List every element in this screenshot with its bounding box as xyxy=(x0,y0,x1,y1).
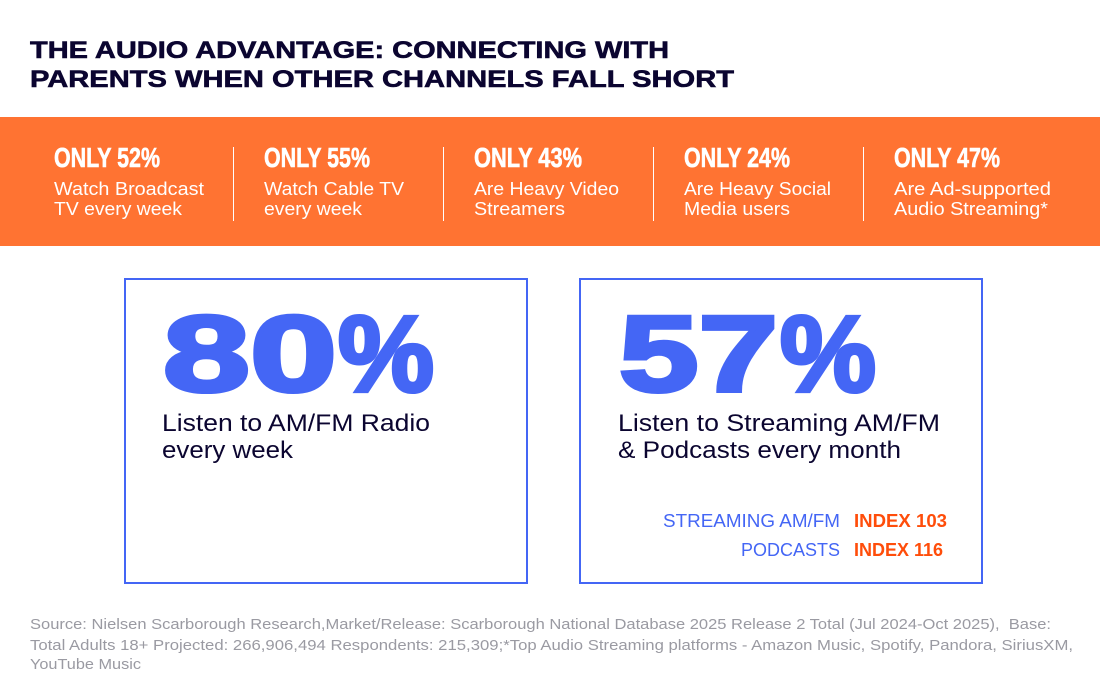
stat: video streamers: ONLY 43% xyxy=(474,142,582,173)
stat: audio streaming: Are Ad-supported xyxy=(894,178,1051,199)
big number 57% xyxy=(619,293,876,414)
stat: audio streaming: ONLY 47% xyxy=(894,142,1000,173)
stat: social media: Media users xyxy=(684,198,790,219)
stat: broadcast TV: ONLY 52% xyxy=(54,142,160,173)
stat: broadcast TV: TV every week xyxy=(54,198,183,219)
stat: cable TV: ONLY 55% xyxy=(264,142,370,173)
stat: broadcast TV xyxy=(54,142,204,219)
stat: video streamers: Streamers xyxy=(474,198,565,219)
description xyxy=(162,410,430,464)
index: streaming AM/FM: STREAMING AM/FM xyxy=(663,511,840,531)
index: podcasts: PODCASTS xyxy=(741,540,840,560)
stat: audio streaming: Audio Streaming* xyxy=(894,198,1048,219)
stat: cable TV: Watch Cable TV xyxy=(264,178,405,199)
description: Listen to Streaming AM/FM xyxy=(618,410,940,437)
source note xyxy=(30,616,1073,673)
description: & Podcasts every month xyxy=(618,437,901,464)
index: streaming AM/FM xyxy=(663,511,947,531)
big number 57%: 57 xyxy=(619,293,778,414)
panel: orange stats band xyxy=(0,117,1100,246)
title xyxy=(30,37,734,93)
stat: cable TV xyxy=(264,142,405,219)
description: every week xyxy=(162,437,294,464)
stat: video streamers xyxy=(474,142,619,219)
big number 80%: 80 xyxy=(163,293,337,414)
big number 57%: % xyxy=(780,293,876,414)
stat: video streamers: Are Heavy Video xyxy=(474,178,619,199)
source note: Source: Nielsen Scarborough Research,Market/Release: Scarborough National Database 2025 Release 2 Total (Jul 2024-Oct 2025), Base: xyxy=(30,616,1051,633)
source note: YouTube Music xyxy=(30,656,142,673)
big number 80%: % xyxy=(338,293,434,414)
index: podcasts: INDEX 116 xyxy=(854,540,943,560)
stat: audio streaming xyxy=(894,142,1051,219)
description xyxy=(618,410,940,464)
panel: streaming and podcasts xyxy=(580,279,982,583)
index: podcasts xyxy=(741,540,943,560)
stat: cable TV: every week xyxy=(264,198,363,219)
stat: broadcast TV: Watch Broadcast xyxy=(54,178,204,199)
big number 80% xyxy=(163,293,434,414)
panel: AM/FM radio xyxy=(125,279,527,583)
title: PARENTS WHEN OTHER CHANNELS FALL SHORT xyxy=(30,66,734,93)
stat: social media: ONLY 24% xyxy=(684,142,790,173)
title: THE AUDIO ADVANTAGE: CONNECTING WITH xyxy=(30,37,669,64)
stat: social media: Are Heavy Social xyxy=(684,178,831,199)
stat: social media xyxy=(684,142,831,219)
source note: Total Adults 18+ Projected: 266,906,494 Respondents: 215,309;*Top Audio Streaming platforms - Amazon Music, Spotify, Pandora, SiriusXM, xyxy=(30,637,1073,654)
description: Listen to AM/FM Radio xyxy=(162,410,430,437)
index: streaming AM/FM: INDEX 103 xyxy=(854,511,947,531)
